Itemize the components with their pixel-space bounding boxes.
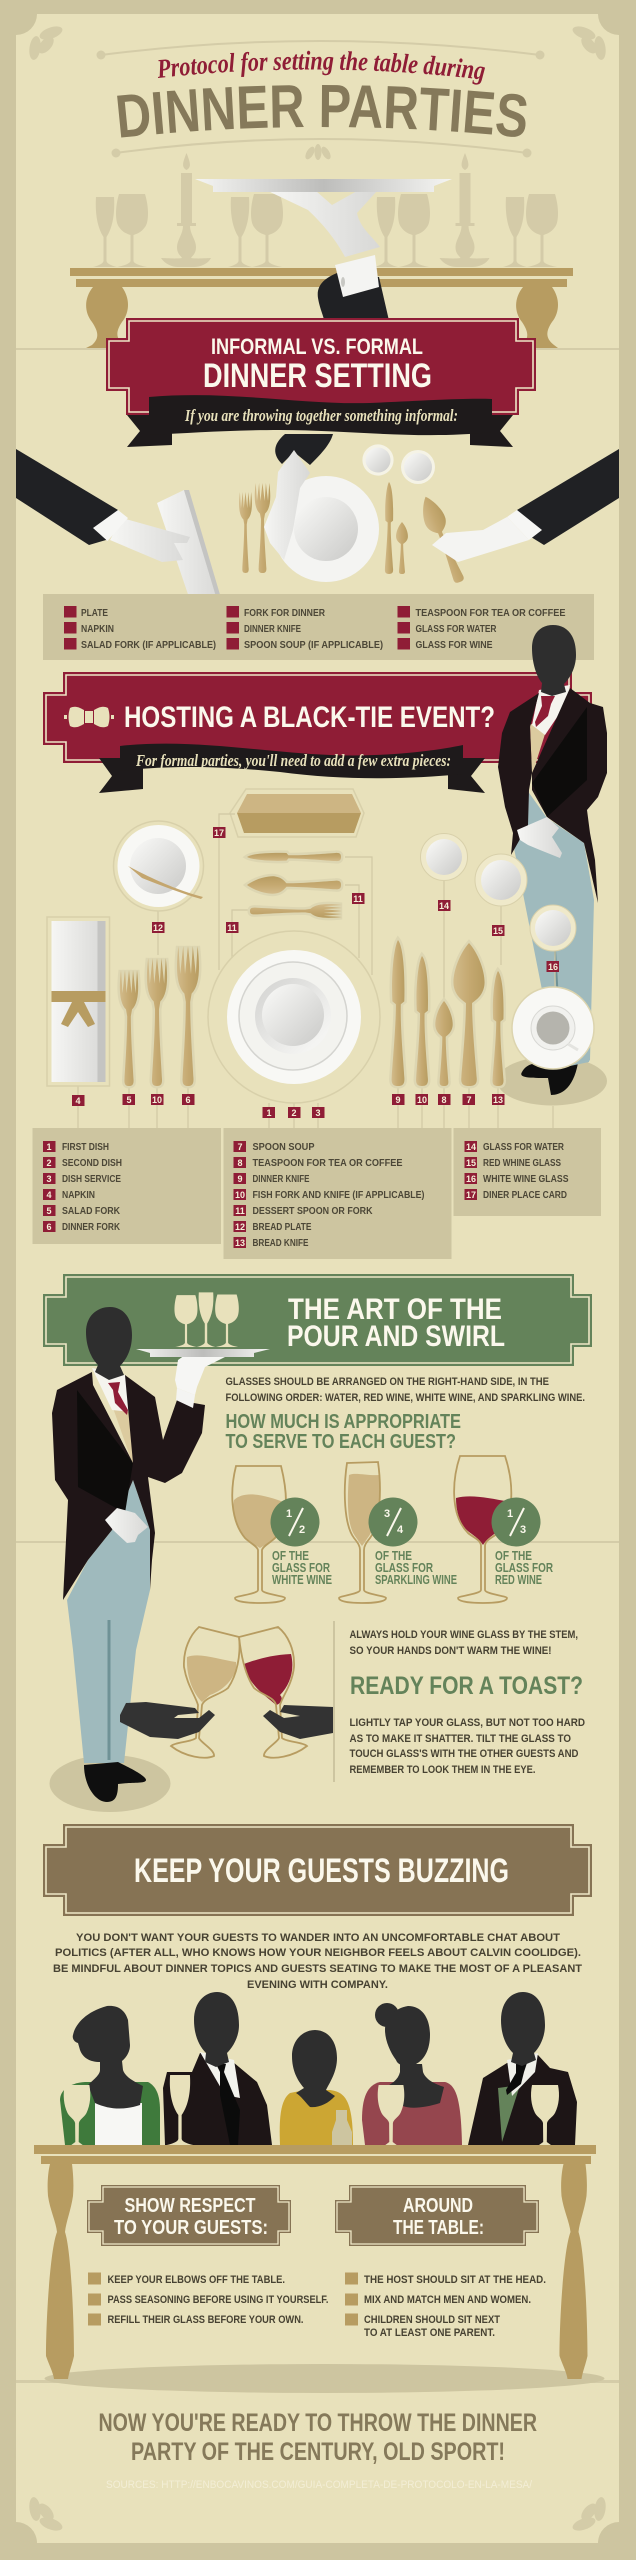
icon: three glasses	[174, 1292, 239, 1347]
legend panel 2: 10	[235, 1190, 245, 1200]
bullets: show respect: KEEP YOUR ELBOWS OFF THE TABLE.	[108, 2274, 285, 2286]
right cutlery	[392, 940, 504, 1086]
banner heading: HOSTING A BLACK-TIE EVENT?	[124, 701, 495, 734]
toast paragraph	[350, 1717, 585, 1776]
host figure	[497, 625, 607, 1106]
banner: informal vs formal	[106, 318, 536, 415]
legend panel 3: RED WHINE GLASS	[483, 1157, 561, 1169]
toast glasses and hands	[120, 1627, 333, 1758]
legend panel 2: 11	[235, 1206, 245, 1216]
legend panel 2: 7	[237, 1142, 243, 1152]
toast paragraph: REMEMBER TO LOOK THEM IN THE EYE.	[350, 1764, 536, 1776]
hand right	[263, 1705, 333, 1739]
legend panel 3: GLASS FOR WATER	[483, 1141, 564, 1153]
formal forks	[120, 946, 199, 1086]
red wine glass top view	[475, 854, 527, 906]
legend panel 1: 4	[46, 1190, 52, 1200]
caption: GLASS FOR	[272, 1560, 330, 1575]
legend text: TEASPOON FOR TEA OR COFFEE	[416, 607, 566, 619]
napkin formal	[47, 917, 110, 1086]
toast paragraph: LIGHTLY TAP YOUR GLASS, BUT NOT TOO HARD	[350, 1717, 585, 1729]
jacket	[52, 1372, 205, 1600]
guest 2	[163, 1992, 272, 2145]
floor line wine section	[16, 1541, 619, 1543]
stem tip	[350, 1629, 578, 1657]
hand left	[120, 1702, 215, 1739]
legend panel 2: 13	[235, 1238, 245, 1248]
legend panel 2: 12	[235, 1222, 245, 1232]
legend text: SALAD FORK (IF APPLICABLE)	[81, 639, 216, 651]
toast heading: READY FOR A TOAST?	[350, 1672, 583, 1700]
lower arc ornament	[112, 139, 530, 156]
pepper shaker	[332, 2110, 352, 2145]
trouser cuffs	[552, 1000, 590, 1066]
legend panel 1: 3	[46, 1174, 52, 1184]
fraction circle: 3	[384, 1508, 390, 1520]
guests paragraph: BE MINDFUL ABOUT DINNER TOPICS AND GUESTS SEATING TO MAKE THE MOST OF A PLEASANT	[53, 1963, 582, 1975]
trousers	[67, 1480, 150, 1763]
legend text	[81, 607, 566, 651]
bullets: show respect: PASS SEASONING BEFORE USING IT YOURSELF.	[108, 2294, 328, 2306]
glass: red wine third	[454, 1456, 553, 1603]
jacket	[498, 688, 607, 903]
icon: center fan	[303, 144, 333, 161]
number tags: 15	[493, 926, 503, 936]
legend panel 2	[224, 1128, 452, 1259]
shoes	[84, 1762, 146, 1802]
right arm with spoon	[432, 449, 619, 562]
tie	[108, 1382, 128, 1415]
guests paragraph	[53, 1932, 582, 1991]
legend panel 1: SALAD FORK	[62, 1205, 120, 1217]
number tags: 4	[75, 1096, 81, 1106]
small banner: show respect	[87, 2185, 291, 2246]
floor shadow	[50, 1755, 170, 1812]
legend panel 1: SECOND DISH	[62, 1157, 122, 1169]
number tags: 11	[227, 923, 237, 933]
legend panel 1: DISH SERVICE	[62, 1173, 121, 1185]
glasses top view informal	[362, 444, 435, 484]
caption	[272, 1548, 332, 1587]
question heading: HOW MUCH IS APPROPRIATE	[226, 1411, 461, 1433]
legend panel 1: DINNER FORK	[62, 1221, 120, 1233]
background glasses and candles	[93, 153, 558, 267]
bullets: around the table	[345, 2272, 546, 2339]
legend panel 2: 9	[237, 1174, 243, 1184]
icon: corner ornament bottom left	[28, 2496, 64, 2533]
legend panel 1: NAPKIN	[62, 1189, 95, 1201]
napkin informal	[157, 490, 221, 609]
icon: corner ornament bottom right	[571, 2496, 607, 2533]
small banner: around the table	[335, 2185, 539, 2246]
question heading: TO SERVE TO EACH GUEST?	[226, 1431, 456, 1453]
left arm with napkin	[16, 449, 190, 562]
legend panel 1: 6	[46, 1222, 52, 1232]
sources: SOURCES: HTTP://ENBOCAVINOS.COM/GUIA-COMPLETA-DE-PROTOCOLO-EN-LA-MESA/	[106, 2479, 533, 2491]
number tags: 16	[548, 962, 558, 972]
ribbon script: If you are throwing together something informal:	[184, 406, 458, 425]
glove	[517, 817, 562, 858]
toast paragraph: TOUCH GLASS'S WITH THE OTHER GUESTS AND	[350, 1748, 579, 1760]
legend panel 3: 15	[466, 1158, 476, 1168]
legend text: FORK FOR DINNER	[244, 607, 325, 619]
head	[532, 625, 576, 696]
fraction circle: 1	[286, 1508, 292, 1520]
stem tip: SO YOUR HANDS DON'T WARM THE WINE!	[350, 1645, 552, 1657]
intro paragraph: GLASSES SHOULD BE ARRANGED ON THE RIGHT-HAND SIDE, IN THE	[226, 1376, 549, 1388]
banner: pour and swirl	[43, 1274, 592, 1366]
connector lines	[78, 814, 555, 1128]
bullets: around the table: MIX AND MATCH MEN AND WOMEN.	[364, 2294, 531, 2306]
white wine glass top view	[530, 905, 576, 951]
legend panel 2: DESSERT SPOON OR FORK	[252, 1205, 373, 1217]
top cutlery	[247, 853, 342, 918]
bullets: around the table: CHILDREN SHOULD SIT NEXT	[364, 2314, 500, 2326]
caption: WHITE WINE	[272, 1572, 332, 1587]
legend panel 3: DINER PLACE CARD	[483, 1189, 567, 1201]
banner: black-tie	[43, 672, 592, 763]
legend panel 2: DINNER KNIFE	[252, 1173, 310, 1185]
legend panel 1: 5	[46, 1206, 52, 1216]
ribbon script: For formal parties, you'll need to add a few extra pieces:	[135, 751, 451, 770]
legend panel 2: FISH FORK AND KNIFE (IF APPLICABLE)	[252, 1189, 424, 1201]
head	[86, 1307, 132, 1380]
number tags: 6	[185, 1095, 191, 1105]
ribbon: formal	[99, 744, 485, 793]
number tags: 11	[353, 894, 363, 904]
floor shadow and line	[16, 2364, 619, 2393]
bullets: around the table: THE HOST SHOULD SIT AT THE HEAD.	[364, 2274, 546, 2286]
cuff	[176, 1388, 195, 1408]
legend text: PLATE	[81, 607, 108, 619]
banner heading line 2: POUR AND SWIRL	[287, 1320, 505, 1353]
legend panel 3: 16	[466, 1174, 476, 1184]
caption: RED WINE	[495, 1572, 542, 1587]
legend panel 3	[454, 1128, 601, 1216]
legend panel 3: 14	[466, 1142, 476, 1152]
fraction circle: 1	[507, 1508, 513, 1520]
title script line: Protocol for setting the table during	[158, 50, 485, 85]
guest 3	[280, 2030, 353, 2145]
banner heading: KEEP YOUR GUESTS BUZZING	[134, 1852, 509, 1890]
number tags	[72, 827, 559, 1118]
banner heading line 1: INFORMAL VS. FORMAL	[211, 334, 423, 359]
caption: OF THE	[375, 1548, 412, 1563]
legend panel 2: BREAD KNIFE	[252, 1237, 308, 1249]
bottom table	[34, 2145, 596, 2379]
legend panel 1: 2	[46, 1158, 52, 1168]
number tags: 9	[395, 1095, 401, 1105]
guest 5	[468, 1992, 577, 2145]
legend panel 2: TEASPOON FOR TEA OR COFFEE	[252, 1157, 402, 1169]
informal cutlery	[239, 482, 470, 586]
number tags: 1	[266, 1108, 272, 1118]
dinner plate setting	[208, 931, 380, 1103]
fraction circle: 2	[299, 1524, 305, 1536]
glass: white wine half	[232, 1466, 332, 1603]
floor line	[16, 348, 619, 350]
tray	[136, 1349, 270, 1357]
legend panel 2: SPOON SOUP	[252, 1141, 314, 1153]
fraction circle	[270, 1498, 320, 1546]
cup and saucer	[512, 987, 594, 1069]
intro paragraph	[226, 1376, 585, 1404]
legend panel 2: 8	[237, 1158, 243, 1168]
sleeve below ribbon	[275, 434, 333, 465]
legend panel 3: 17	[466, 1190, 476, 1200]
guest 1	[60, 2006, 160, 2145]
caption: GLASS FOR	[495, 1560, 553, 1575]
legend panel informal	[43, 594, 594, 660]
top arc ornament	[98, 41, 544, 58]
raised glove	[175, 1355, 225, 1395]
tie	[535, 696, 555, 727]
plate informal	[273, 476, 379, 582]
number tags: 7	[466, 1095, 472, 1105]
intro paragraph: FOLLOWING ORDER: WATER, RED WINE, WHITE WINE, AND SPARKLING WINE.	[226, 1392, 585, 1404]
bullets: show respect	[88, 2272, 328, 2326]
shoes	[521, 1063, 578, 1095]
legend text: DINNER KNIFE	[244, 623, 301, 635]
legend panel 1: FIRST DISH	[62, 1141, 109, 1153]
heading: AROUND	[403, 2195, 473, 2217]
vest	[112, 1405, 135, 1465]
number tags: 5	[126, 1095, 132, 1105]
caption	[495, 1548, 553, 1587]
caption: SPARKLING WINE	[375, 1572, 457, 1587]
water glass top view	[420, 834, 468, 880]
caption: GLASS FOR	[375, 1560, 433, 1575]
heading line 2: TO YOUR GUESTS:	[114, 2217, 268, 2239]
number tags: 14	[439, 901, 449, 911]
floor shadow	[497, 1056, 607, 1106]
legend text: GLASS FOR WATER	[416, 623, 497, 635]
toast paragraph: AS TO MAKE IT SHATTER. TILT THE GLASS TO	[350, 1733, 571, 1745]
fraction circle	[492, 1498, 540, 1546]
number tags: 8	[441, 1095, 447, 1105]
question heading	[226, 1411, 461, 1453]
fraction circle: 3	[520, 1524, 526, 1536]
ribbon: informal	[127, 395, 513, 447]
icon: bow tie	[64, 707, 114, 727]
waiter figure	[50, 1307, 270, 1812]
icon: corner ornament top right	[571, 24, 607, 61]
number tags: 17	[214, 828, 224, 838]
legend text: NAPKIN	[81, 623, 114, 635]
number tags: 12	[153, 923, 163, 933]
shirt collar	[532, 685, 570, 735]
bullets: around the table: TO AT LEAST ONE PARENT.	[364, 2327, 495, 2339]
banner heading: THE ART OF THE	[288, 1293, 502, 1326]
guests paragraph: YOU DON'T WANT YOUR GUESTS TO WANDER INTO AN UNCOMFORTABLE CHAT ABOUT	[76, 1932, 560, 1944]
legend panel 1: 1	[46, 1142, 52, 1152]
legend text: SPOON SOUP (IF APPLICABLE)	[244, 639, 383, 651]
guest 4	[362, 2003, 462, 2145]
number tags: 2	[291, 1108, 297, 1118]
shirt collar	[92, 1368, 132, 1412]
fraction circle: 4	[397, 1524, 404, 1536]
server hand on plate	[264, 450, 310, 560]
closing statement: PARTY OF THE CENTURY, OLD SPORT!	[131, 2438, 505, 2466]
number tags: 13	[493, 1095, 503, 1105]
stem tip: ALWAYS HOLD YOUR WINE GLASS BY THE STEM,	[350, 1629, 578, 1641]
guests paragraph: EVENING WITH COMPANY.	[247, 1979, 388, 1991]
caption	[375, 1548, 457, 1587]
closing statement	[98, 2409, 537, 2466]
banner heading line 2: DINNER SETTING	[203, 357, 432, 395]
trousers	[513, 790, 594, 1075]
caption: OF THE	[272, 1548, 309, 1563]
guests paragraph: POLITICS (AFTER ALL, WHO KNOWS HOW YOUR NEIGHBOR FEELS ABOUT CALVIN COOLIDGE).	[55, 1947, 581, 1959]
server arm with tray	[195, 179, 452, 325]
title main: DINNER PARTIES	[117, 85, 526, 138]
table top	[70, 268, 573, 348]
waist glove	[105, 1508, 148, 1543]
bread plate	[114, 821, 204, 911]
legend panel 1	[32, 1128, 221, 1244]
fraction circle	[368, 1498, 418, 1546]
banner: keep guests buzzing	[43, 1824, 592, 1916]
glass: sparkling wine three quarters	[339, 1462, 457, 1603]
caption: OF THE	[495, 1548, 532, 1563]
place card	[230, 789, 364, 837]
heading line 2: THE TABLE:	[393, 2217, 484, 2239]
number tags: 10	[152, 1095, 162, 1105]
legend panel 2: BREAD PLATE	[252, 1221, 312, 1233]
vest	[530, 712, 552, 775]
number tags: 3	[315, 1108, 321, 1118]
legend panel 3: WHITE WINE GLASS	[483, 1173, 568, 1185]
heading: SHOW RESPECT	[124, 2195, 256, 2217]
legend text: GLASS FOR WINE	[416, 639, 492, 651]
vertical divider	[333, 1621, 335, 1782]
number tags: 10	[417, 1095, 427, 1105]
icon: corner ornament top left	[28, 24, 64, 61]
bullets: show respect: REFILL THEIR GLASS BEFORE YOUR OWN.	[108, 2314, 304, 2326]
